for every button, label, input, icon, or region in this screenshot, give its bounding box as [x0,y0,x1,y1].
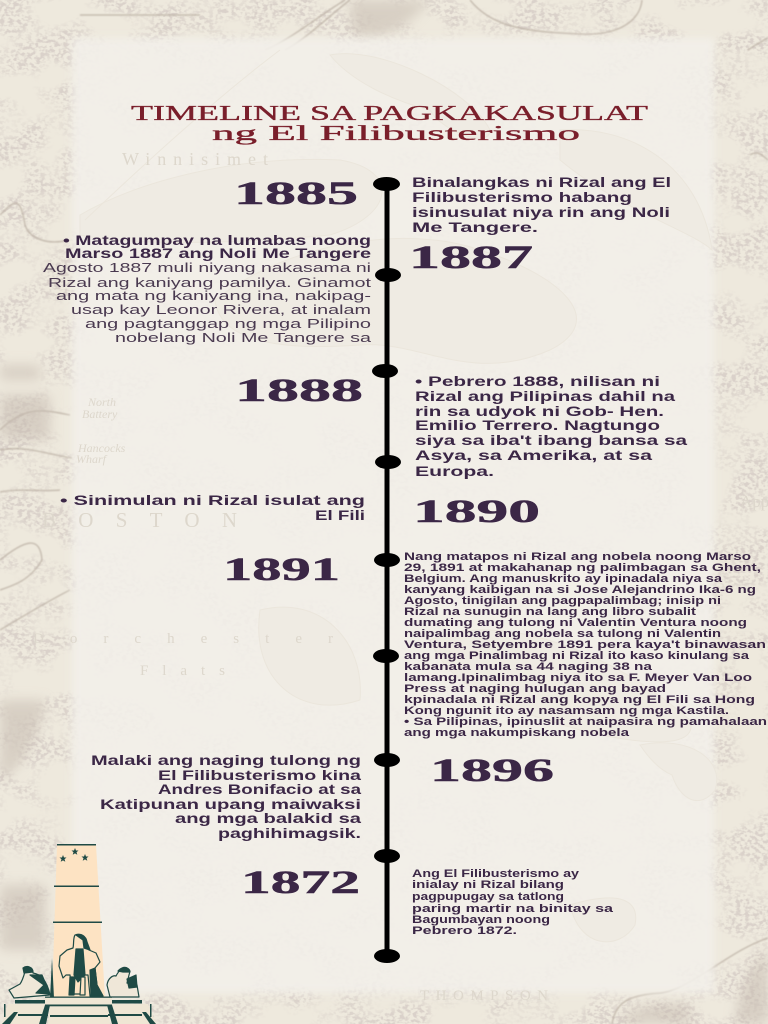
text: 1885 event: isinusulat niya rin ang Noli [412,205,670,220]
text: 1887 event [43,233,372,345]
seated figure left [9,967,50,998]
text: 1890 event [60,493,365,523]
text: 1888 event: Europa. [415,464,494,479]
year: 1891: 1891 [223,552,340,588]
text: 1891 event: kabanata mula sa 44 naging 38 na [404,661,653,673]
text: 1885 event: Binalangkas ni Rizal ang El [412,175,671,190]
timeline axis with nodes [372,177,401,963]
text: 1872 event: Ang El Filibusterismo ay [412,868,579,880]
text: 1888 event: Rizal ang Pilipinas dahil na [415,389,676,404]
text: 1896 event: El Filibusterismo kina [158,768,362,783]
pedestal [2,997,156,1024]
icon: Rizal monument [2,844,156,1024]
obelisk [52,845,105,998]
text: 1891 event: 29, 1891 at makahanap ng palimbagan sa Ghent, [404,562,761,574]
background: antique map texture: North [87,395,116,409]
text: 1891 event [404,551,767,739]
year: 1888: 1888 [235,373,363,409]
text: 1891 event: Rizal na sunugin na lang ang libro subalit [404,606,697,618]
text: 1887 event: nobelang Noli Me Tangere sa [115,330,372,345]
title [131,101,648,145]
text: 1887 event: ang mata ng kaniyang ina, nakipag- [56,288,371,303]
text: 1896 event: Andres Bonifacio at sa [158,782,362,797]
text: 1891 event: Agosto, tinigilan ang pagpapalimbag; inisip ni [404,595,721,607]
text: 1891 event: ang mga Pinalimbag ni Rizal ito kaso kinulang sa [404,650,750,662]
text: 1885 event: Me Tangere. [412,220,538,235]
text: 1891 event: Press at naging hulugan ang bayad [404,683,666,695]
text: 1891 event: naipalimbag ang nobela sa tulong ni Valentin [404,628,721,640]
text: 1891 event: kanyang kaibigan na si Jose Alejandrino Ika-6 ng [404,584,756,596]
background: antique map texture: Wharf [76,452,108,466]
text: 1888 event: Emilio Terrero. Nagtungo [415,418,660,433]
background: antique map texture: Dorchester [33,631,333,647]
text: 1891 event: dumating ang tulong ni Valentin Ventura noong [404,617,747,629]
year: 1885: 1885 [234,176,358,212]
text: 1896 event: ang mga balakid sa [175,811,362,826]
background: antique map texture: Battery [82,407,118,421]
year: 1896: 1896 [430,753,554,789]
text: 1891 event: • Sa Pilipinas, ipinuslit at naipasira ng pamahalaan [404,716,767,728]
text: 1888 event: • Pebrero 1888, nilisan ni [415,374,660,389]
title: TIMELINE SA PAGKAKASULAT [131,101,648,125]
text: 1896 event [91,753,362,841]
text: 1887 event: usap kay Leonor Rivera, at inalam [71,302,371,317]
text: 1891 event: Nang matapos ni Rizal ang nobela noong Marso [404,551,752,563]
background: antique map texture: BOSTON [42,508,237,532]
text: 1887 event: Agosto 1887 muli niyang nakasama ni [43,260,371,275]
text: 1891 event: Kong ngunit ito ay nasamsam ng mga Kastila. [404,705,729,717]
central pale panel [72,38,714,993]
text: 1891 event: lamang.Ipinalimbag niya ito sa F. Meyer Van Loo [404,672,753,684]
background: antique map texture: Flats [140,663,225,679]
text: 1887 event: Rizal ang kaniyang pamilya. Ginamot [48,275,372,290]
text: 1891 event: Belgium. Ang manuskrito ay ipinadala niya sa [404,573,723,585]
text: 1888 event [415,374,688,479]
text: 1890 event: El Fili [315,508,365,523]
text: 1872 event [412,868,614,937]
text: 1888 event: rin sa udyok ni Gob- Hen. [415,404,664,419]
year: 1890: 1890 [413,494,540,530]
background: antique map texture: Hancocks [77,441,126,455]
statue of Rizal [59,934,103,996]
text: 1872 event: Bagumbayan noong [412,914,550,926]
year: 1887: 1887 [409,240,533,276]
text: 1872 event: pagpupugay sa tatlong [412,891,564,903]
text: 1888 event: siya sa iba't ibang bansa sa [415,433,688,448]
background: antique map texture: THOMPSON [420,988,548,1004]
text: 1888 event: Asya, sa Amerika, at sa [415,448,653,463]
year: 1872: 1872 [241,865,360,901]
text: 1872 event: inialay ni Rizal bilang [412,879,564,891]
text: 1885 event: Filibusterismo habang [412,190,632,205]
text: 1891 event: kpinadala ni Rizal ang kopya ng El Fili sa Hong [404,694,755,706]
text: 1887 event: Marso 1887 ang Noli Me Tangere [65,246,372,261]
text: 1885 event [412,175,671,235]
text: 1872 event: Pebrero 1872. [412,925,517,937]
title: ng El Filibusterismo [212,121,580,145]
seated figure right [107,967,139,997]
text: 1896 event: Malaki ang naging tulong ng [91,753,361,768]
text: 1872 event: paring martir na binitay sa [412,903,614,915]
text: 1896 event: paghihimagsik. [218,826,361,841]
text: 1891 event: Ventura, Setyembre 1891 pera kaya't binawasan [404,639,766,651]
text: 1891 event: ang mga nakumpiskang nobela [404,727,630,739]
text: 1887 event: ang pagtanggap ng mga Pilipino [85,316,371,331]
background: antique map texture: Winnisimet [122,149,268,169]
text: 1896 event: Katipunan upang maiwaksi [100,797,361,812]
text: 1887 event: • Matagumpay na lumabas noong [63,233,371,248]
text: 1890 event: • Sinimulan ni Rizal isulat ang [60,493,365,508]
faint map shapes [80,54,717,942]
